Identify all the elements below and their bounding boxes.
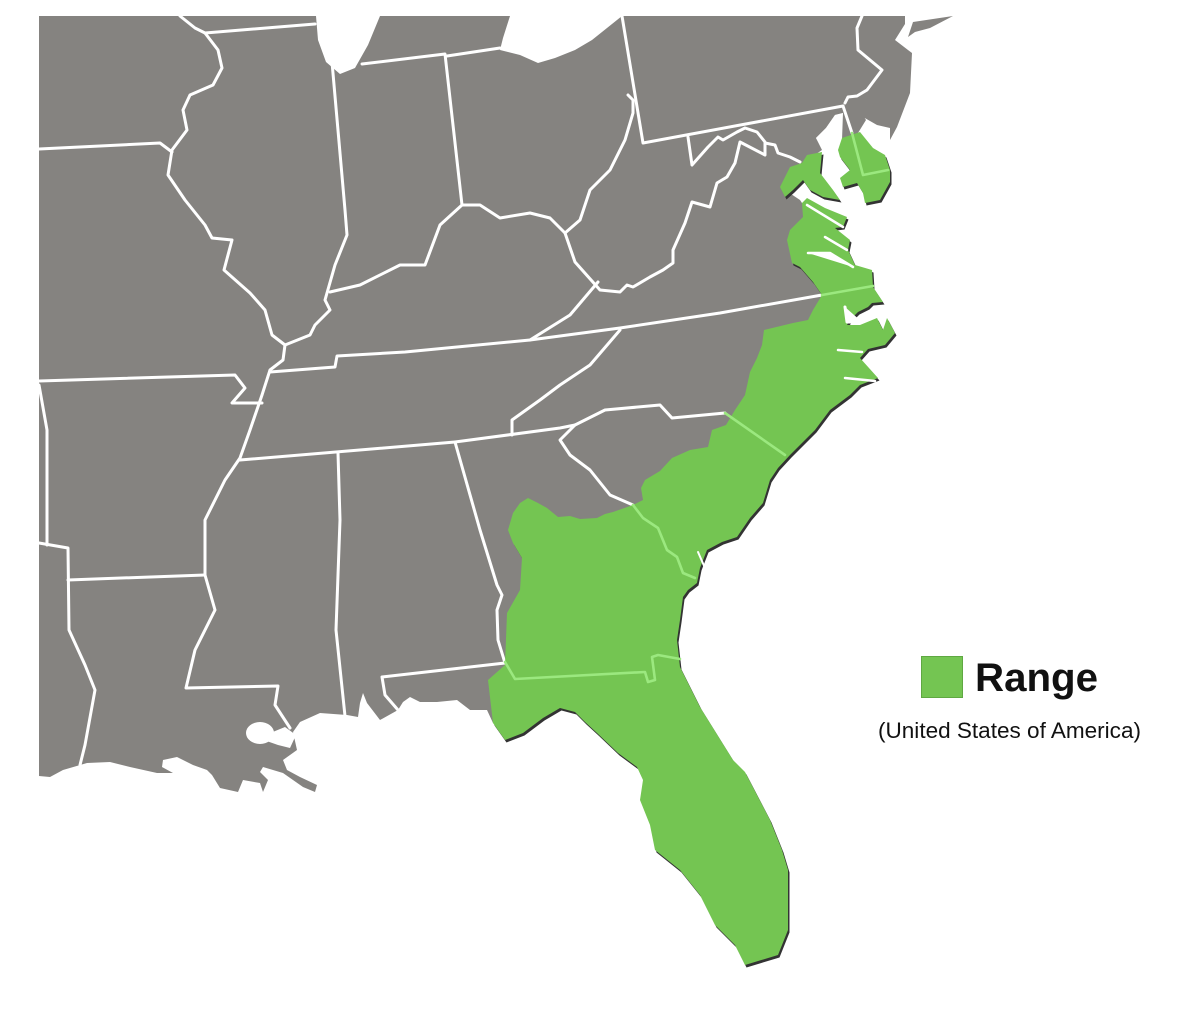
long island: [908, 16, 953, 37]
bay on the louisiana coast: [258, 727, 296, 748]
range: inlets: [698, 205, 875, 568]
state borders: [39, 16, 882, 765]
range: state borders inside range: [505, 133, 888, 682]
chesapeake bay upper: [816, 113, 850, 205]
range: green area: [488, 132, 895, 965]
land mass: eastern United States: [39, 16, 912, 792]
lake pontchartrain: [246, 722, 274, 744]
legend swatch: [922, 656, 962, 698]
legend title: Range: [975, 656, 1098, 700]
legend subtitle: (United States of America): [878, 718, 1141, 743]
legend: [878, 656, 1141, 743]
range: shadow: [490, 134, 896, 968]
